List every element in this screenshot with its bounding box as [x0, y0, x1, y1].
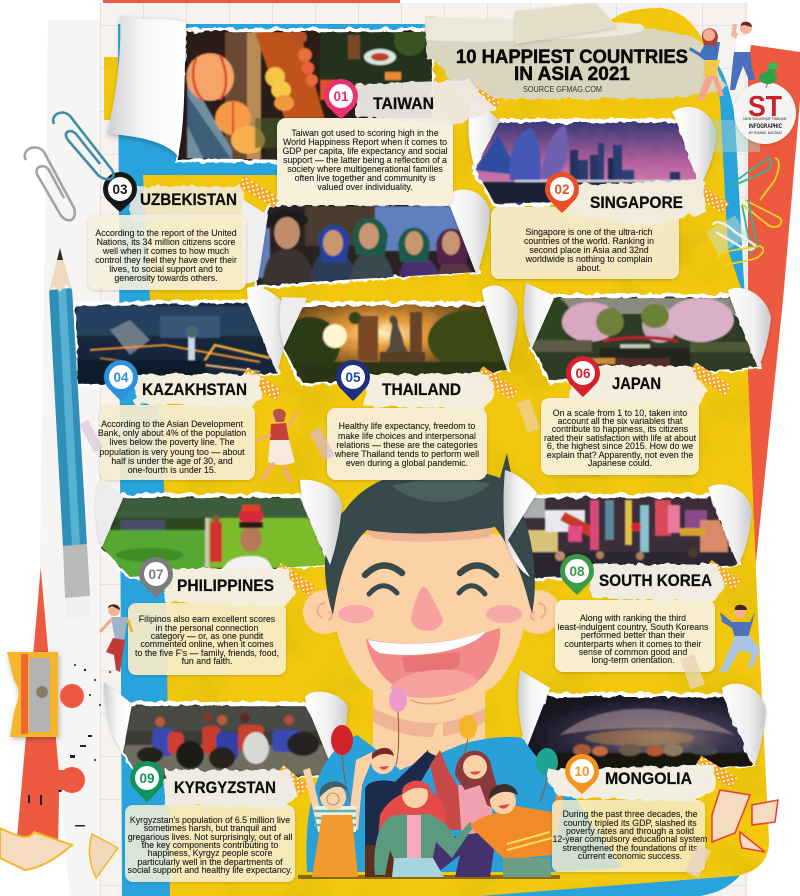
heading: Kyrgyzstan: KYRGYZSTAN — [174, 778, 276, 797]
body text: Thailand: even during a global pandemic. — [346, 458, 468, 468]
body text: Singapore: worldwide is nothing to complain — [525, 254, 652, 264]
ink splatter left — [28, 664, 111, 826]
card: Philippines — [128, 568, 295, 675]
pin: 04: 04 — [113, 370, 129, 385]
heading strip: Japan — [570, 366, 708, 405]
heading strip: Mongolia — [547, 765, 716, 802]
body text: South Korea: counterparts when it comes to their — [565, 639, 702, 649]
tape: Philippines — [274, 563, 316, 597]
body text: Taiwan: often live together and community is — [295, 173, 436, 183]
heading strip: Taiwan — [356, 80, 497, 126]
pin: 06: 06 — [575, 366, 591, 381]
body text: Kazakhstan: Bank, only about 4% of the population — [98, 428, 246, 438]
hair — [325, 453, 535, 615]
body text: Japan: Japanese could. — [588, 458, 652, 468]
pin: 06 — [566, 356, 600, 397]
icon: green push pin — [759, 62, 778, 88]
body text: Thailand: relations — these are the categories — [336, 440, 478, 450]
card: Uzbekistan — [88, 186, 246, 290]
flap: Thailand left — [280, 297, 307, 347]
body text: South Korea: performed better than their — [581, 630, 685, 640]
body text: Taiwan: valued over individuality. — [317, 182, 413, 192]
balloon: teal — [536, 748, 558, 802]
body text: Uzbekistan: generosity towards others. — [114, 273, 218, 283]
body text: Kyrgyzstan: happiness, Kyrgyz people score — [148, 848, 272, 858]
body text: Philippines: commented online, when it comes — [140, 639, 274, 649]
flap: Taiwan torn paper curl — [107, 16, 186, 156]
body text: Mongolia: During the past three decades, the — [563, 809, 698, 819]
heading: Taiwan: TAIWAN — [373, 94, 434, 113]
body text: Philippines: to the five F’s — family, friends, food, — [135, 648, 279, 658]
title torn paper banner — [425, 3, 727, 99]
photo: Thailand temple sunset — [280, 303, 512, 385]
body text: Mongolia: 12-year compulsory educational system — [552, 834, 708, 844]
body text: Singapore: countries of the world. Ranking in — [524, 236, 654, 246]
neck — [373, 680, 485, 800]
icon: teal paper clip — [53, 112, 114, 179]
pale tape stickers — [79, 120, 760, 878]
person: man jumping Philippines — [100, 604, 132, 672]
blue shirt of big boy — [306, 735, 622, 872]
body text: South Korea: long-term orientation. — [591, 655, 675, 665]
balloon: yellow — [459, 715, 477, 768]
body text: Taiwan: Taiwan got used to scoring high in the — [291, 128, 439, 138]
heading: Japan: JAPAN — [612, 374, 661, 393]
tape: South Korea — [705, 560, 741, 590]
card: Japan — [541, 366, 708, 475]
body text: Uzbekistan: lives, to social support and to — [109, 264, 223, 274]
body text: Mongolia: current economic success. — [578, 851, 682, 861]
badge: ST infographic seal: NEW SOUVENIR TRIBUNE — [743, 117, 788, 121]
pin: 09: 09 — [139, 771, 155, 786]
body text: Kyrgyzstan: Kyrgyzstan’s population of 6.5 million live — [130, 815, 290, 825]
photo: Taiwan lanterns — [178, 24, 432, 164]
body text: Taiwan: GDP per capita, life expectancy and social — [282, 146, 448, 156]
body text: Japan: rated their satisfaction with life at about — [544, 433, 697, 443]
person: woman dancing Kazakhstan — [256, 409, 298, 482]
closed eyes — [369, 586, 397, 594]
body text: Kyrgyzstan: social support and healthy life expectancy. — [128, 865, 292, 875]
background: blue sheet — [118, 24, 750, 896]
body text: Thailand: where Thailand tends to perform well — [334, 449, 479, 459]
body text: Kazakhstan: According to the Asian Development — [101, 419, 243, 429]
person: dark jacket boy — [365, 722, 443, 877]
body text: Uzbekistan: well when it comes to how much — [102, 246, 229, 256]
body text: Japan: explain that? Apparently, not even the — [547, 450, 693, 460]
card: Taiwan — [277, 80, 497, 205]
photo: Singapore skyline — [473, 120, 700, 206]
body text: Philippines: Filipinos also earn excellent scores — [139, 614, 276, 624]
background: red paper right — [700, 45, 800, 600]
flap: Philippines left — [96, 482, 124, 547]
pin: 04 — [104, 360, 138, 401]
cheeks — [338, 605, 374, 623]
heading strip: Kyrgyzstan — [165, 770, 298, 808]
person: boy with orange sweater — [470, 784, 564, 877]
heading: Mongolia: MONGOLIA — [605, 769, 692, 788]
body text: Philippines: category — or, as one pundit — [151, 631, 264, 641]
body text: Japan: 6, the highest since 2015. How do we — [547, 441, 693, 451]
body text: Mongolia: country tripled its GDP, slashed its — [563, 818, 697, 828]
heading strip: Kazakhstan — [135, 374, 262, 408]
pencil shavings left — [0, 828, 118, 878]
photo: Mongolia night sky — [521, 694, 754, 773]
background: pale sheet left — [40, 20, 122, 896]
flap: Japan left — [524, 283, 555, 348]
person: woman top right — [689, 28, 724, 100]
source line: SOURCE GFMAG.COM — [523, 85, 602, 94]
flap: Korea right — [708, 484, 752, 565]
body text: Japan: On a scale from 1 to 10, taken into — [553, 408, 687, 418]
flap: Kazakhstan right — [247, 287, 290, 373]
ear left — [303, 590, 347, 634]
heading strip: Singapore — [568, 180, 706, 226]
body text: Kyrgyzstan: gregarious lives. Not surprisingly, out of all — [128, 832, 292, 842]
card: Singapore — [491, 180, 706, 279]
person: woman with overalls — [303, 752, 372, 877]
body text: Uzbekistan: control they feel they have over their — [95, 255, 237, 265]
nose — [411, 587, 443, 631]
badge: ST infographic seal: BY ROMMEL MAGSINO — [749, 131, 782, 135]
head — [332, 532, 528, 702]
body text: Taiwan: society where multigenerational families — [287, 164, 443, 174]
banner tape — [515, 3, 618, 44]
pin: 07 — [139, 557, 173, 598]
body text: South Korea: Along with ranking the third — [580, 613, 686, 623]
body text: Philippines: in the personal connection — [156, 623, 258, 633]
flap: South Korea left, over hair — [504, 470, 537, 577]
flap: Japan right — [728, 288, 771, 368]
pin: 03 — [103, 172, 137, 212]
badge: ST infographic seal — [734, 82, 796, 144]
illustration: happy boy face — [303, 453, 560, 800]
photo: Kazakhstan city — [76, 301, 279, 386]
illustration: celebrating friends group — [298, 688, 622, 879]
icon: pencil — [49, 248, 91, 618]
pin: 03: 03 — [112, 182, 128, 197]
eyebrows — [365, 565, 402, 575]
body text: Kazakhstan: population is very young too — about — [99, 447, 245, 457]
body text: Philippines: fun and faith. — [182, 656, 232, 666]
pin: 08 — [560, 554, 594, 595]
card: South Korea — [555, 564, 725, 672]
photo: Japan cherry blossoms — [528, 295, 760, 382]
flap: Singapore right — [672, 107, 716, 186]
flap: Thailand right — [482, 286, 518, 370]
tape: Kazakhstan — [241, 367, 283, 401]
flap: Singapore left — [469, 97, 500, 168]
pin: 05: 05 — [345, 370, 361, 385]
body text: Kyrgyzstan: sometimes harsh, but tranquil and — [144, 823, 276, 833]
balloon: red — [331, 725, 353, 805]
card: Kyrgyzstan — [125, 770, 298, 882]
heading: Kazakhstan: KAZAKHSTAN — [142, 380, 247, 399]
pin: 10: 10 — [574, 764, 590, 779]
heading strip: South Korea — [590, 564, 725, 602]
tape: Japan — [689, 362, 731, 396]
badge: ST infographic seal: INFOGRAPHIC — [749, 124, 783, 130]
flap: Uzbekistan right — [447, 189, 490, 276]
pin: 09 — [130, 761, 164, 802]
flap: Mongolia right — [722, 684, 766, 766]
ear right — [516, 590, 560, 634]
pencil shavings right — [712, 790, 778, 852]
photo: Philippines terraces and girl — [100, 495, 330, 580]
photo: South Korea neon street — [505, 495, 740, 580]
heading strip: Uzbekistan — [130, 186, 246, 222]
flap: Philippines right, over hair — [300, 480, 342, 565]
body text: Mongolia: strengthened the foundations of its — [563, 843, 698, 853]
tape: Singapore — [687, 181, 729, 213]
body text: Kyrgyzstan: particularly well in the departments of — [137, 857, 283, 867]
heading strip: Thailand — [365, 374, 495, 410]
body text: Taiwan: support — the latter being a reflection of a — [283, 155, 447, 165]
pin: 07: 07 — [148, 567, 164, 582]
icon: pencil sharpener — [7, 652, 58, 737]
heading: Thailand: THAILAND — [382, 380, 461, 399]
person: woman with pink top — [430, 750, 505, 877]
tape: Thailand — [476, 366, 518, 400]
bottom shadow — [298, 875, 560, 879]
mouth — [366, 628, 500, 697]
flap: Kyrgyzstan right — [305, 692, 348, 775]
body text: Japan: account all the six variables that — [558, 416, 683, 426]
heading strip: Philippines — [165, 568, 295, 606]
pin: 02: 02 — [554, 182, 570, 197]
balloon: pink — [389, 688, 407, 765]
body text: Singapore: about. — [577, 263, 601, 273]
pin: 08: 08 — [569, 564, 585, 579]
body text: South Korea: least-indulgent country, South Koreans — [558, 622, 709, 632]
pin: 10 — [565, 754, 599, 794]
red ink blobs — [50, 684, 85, 793]
tape: Uzbekistan — [238, 176, 280, 208]
body text: Uzbekistan: Nations, its 34 million citizens score — [97, 237, 236, 247]
body text: Japan: contribute to happiness, its citizens — [552, 424, 689, 434]
card: Kazakhstan — [98, 374, 262, 480]
icon: grey paper clip — [25, 147, 75, 220]
tape: title — [459, 80, 500, 111]
body text: Uzbekistan: According to the report of the United — [95, 228, 237, 238]
title: 10 HAPPIEST COUNTRIES — [456, 46, 688, 68]
photo: Uzbekistan women — [255, 203, 479, 287]
body text: Thailand: Healthy life expectancy, freedom to — [339, 421, 475, 431]
pin: 01: 01 — [333, 89, 349, 104]
heading: Uzbekistan: UZBEKISTAN — [140, 190, 237, 209]
background: red strip left — [17, 480, 78, 850]
title — [456, 46, 688, 85]
flap: Mongolia left — [518, 670, 550, 748]
person: man dancing South Korea — [720, 605, 760, 672]
card: Mongolia — [547, 765, 716, 872]
person: man top right — [730, 22, 755, 90]
heading: South Korea: SOUTH KOREA — [599, 571, 712, 590]
pin: 01 — [324, 79, 358, 119]
body text: Singapore: second place in Asia and 32nd — [529, 245, 649, 255]
pin: 05 — [336, 360, 370, 401]
photo: Kyrgyzstan horse riders — [121, 703, 347, 782]
body text: Mongolia: poverty rates and through a solid — [566, 826, 694, 836]
body text: Kazakhstan: one-fourth is under 15. — [128, 465, 216, 475]
body text: Taiwan: World Happiness Report when it comes to — [283, 137, 447, 147]
tape: Kyrgyzstan — [276, 765, 308, 795]
heading: Singapore: SINGAPORE — [590, 193, 683, 212]
flap: Kyrgyzstan left — [104, 682, 132, 752]
body text: Kazakhstan: half is under the age of 30, and — [111, 456, 233, 466]
body text: South Korea: sense of common good and — [579, 647, 687, 657]
heading: Philippines: PHILIPPINES — [177, 576, 274, 595]
body text: Thailand: make life choices and interpersonal — [338, 431, 476, 441]
flap: Uzbekistan left — [241, 198, 268, 284]
badge: ST infographic seal: ST — [748, 91, 782, 123]
icon: coloured paper clips — [713, 158, 781, 265]
tape: Mongolia — [695, 756, 737, 788]
title: IN ASIA 2021 — [514, 63, 630, 85]
card: Thailand — [327, 374, 495, 480]
body text: Kazakhstan: lives below the poverty line. The — [109, 437, 235, 447]
body text: Singapore: Singapore is one of the ultra-rich — [525, 227, 653, 237]
pin: 02 — [545, 172, 579, 213]
person: red haired woman — [374, 781, 474, 877]
body text: Kyrgyzstan: the key components contributing to — [142, 840, 278, 850]
